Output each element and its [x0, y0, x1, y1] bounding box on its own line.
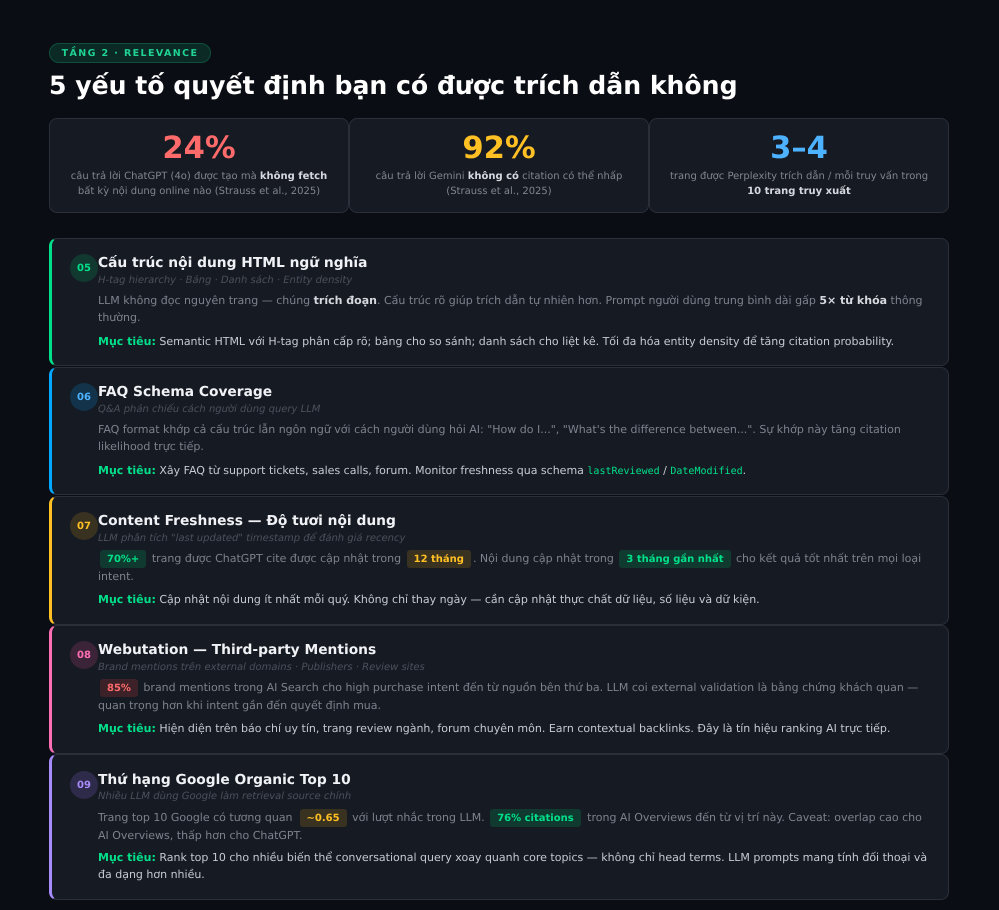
body text: intent.: [98, 570, 134, 583]
stat description: bất kỳ nội dung online nào (Strauss et al., 2025): [78, 186, 320, 197]
number badge 07: [70, 512, 98, 540]
stat card: 24%: [49, 118, 349, 213]
subtitle: Brand mentions trên external domains · Publishers · Review sites: [98, 662, 425, 673]
stat value: 92%: [462, 131, 536, 166]
stat description: [71, 170, 327, 197]
body text: [98, 550, 921, 583]
number badge 08: [70, 641, 98, 669]
body text: AI Overviews, thấp hơn cho ChatGPT.: [98, 829, 302, 842]
goal: Mục tiêu: Hiện diện trên báo chí uy tín, trang review ngành, forum chuyên môn. Earn contextual backlinks. Đây là tín hiệu ranking AI trực tiếp.: [98, 722, 890, 735]
number badge 05: [70, 254, 98, 282]
body text: FAQ format khớp cả cấu trúc lẫn ngôn ngữ với cách người dùng hỏi AI: "How do I...", "What's the difference between...". Sự khớp này tăng citation: [98, 423, 901, 436]
panel: factor 06: [49, 367, 949, 495]
body text: 3 tháng gần nhất: [626, 554, 724, 565]
stat value: 3–4: [770, 131, 828, 166]
heading: Webutation — Third-party Mentions: [98, 642, 376, 658]
stat description: 10 trang truy xuất: [747, 186, 851, 197]
stat description: [670, 170, 928, 197]
body text: trang được ChatGPT cite được cập nhật trong . Nội dung cập nhật trong cho kết quả tốt nhất trên mọi loại: [152, 552, 921, 565]
body text: 85%: [107, 683, 131, 694]
heading: Cấu trúc nội dung HTML ngữ nghĩa: [98, 255, 367, 271]
subtitle: H-tag hierarchy · Bảng · Danh sách · Entity density: [98, 275, 352, 286]
goal: Mục tiêu: Cập nhật nội dung ít nhất mỗi quý. Không chỉ thay ngày — cần cập nhật thực chất dữ liệu, số liệu và dữ kiện.: [98, 593, 760, 606]
body text: ~0.65: [307, 813, 340, 824]
subtitle: LLM phân tích "last updated" timestamp để đánh giá recency: [98, 533, 405, 544]
subtitle: Nhiều LLM dùng Google làm retrieval source chính: [98, 791, 351, 802]
panel: factor 05: [49, 238, 949, 366]
body text: Trang top 10 Google có tương quan với lượt nhắc trong LLM. trong AI Overviews đến từ vị trí này. Caveat: overlap cao cho: [98, 811, 922, 824]
body text: likelihood trực tiếp.: [98, 440, 204, 453]
goal: Mục tiêu: Xây FAQ từ support tickets, sales calls, forum. Monitor freshness qua schema lastReviewed / DateModified.: [98, 464, 746, 477]
heading: FAQ Schema Coverage: [98, 384, 272, 400]
tier tag: TẦNG 2 · RELEVANCE: [62, 48, 198, 59]
stat card: 92%: [349, 118, 649, 213]
panel: factor 07: [49, 496, 949, 625]
stat description: câu trả lời Gemini không có citation có thể nhấp: [376, 171, 622, 182]
body text: 70%+: [107, 554, 139, 565]
body text: 12 tháng: [414, 554, 464, 565]
stat description: [376, 170, 622, 197]
body text: brand mentions trong AI Search cho high purchase intent đến từ nguồn bên thứ ba. LLM coi external validation là bằng chứng khách quan —: [143, 681, 918, 694]
panel: factor 09: [49, 754, 949, 900]
goal: Mục tiêu: Rank top 10 cho nhiều biến thể conversational query xoay quanh core topics — không chỉ head terms. LLM prompts mang tính đối thoại và: [98, 851, 927, 864]
stat card: 3-4: [649, 118, 949, 213]
stat description: câu trả lời ChatGPT (4o) được tạo mà không fetch: [71, 171, 327, 182]
number badge 08: 08: [77, 650, 91, 661]
panel: factor 08: [49, 625, 949, 754]
body text: [98, 679, 918, 712]
stat value: 24%: [162, 131, 236, 166]
number badge 06: [70, 383, 98, 411]
number badge 06: 06: [77, 392, 91, 403]
body text: 76% citations: [497, 813, 574, 824]
stat description: trang được Perplexity trích dẫn / mỗi truy vấn trong: [670, 171, 928, 182]
tier tag: [49, 43, 211, 63]
body text: LLM không đọc nguyên trang — chúng trích đoạn. Cấu trúc rõ giúp trích dẫn tự nhiên hơn. Prompt người dùng trung bình dài gấp 5× từ khóa thông: [98, 294, 923, 307]
goal: [98, 851, 927, 881]
goal: Mục tiêu: Semantic HTML với H-tag phân cấp rõ; bảng cho so sánh; danh sách cho liệt kê. Tối đa hóa entity density để tăng citation probability.: [98, 335, 894, 348]
stat description: (Strauss et al., 2025): [446, 186, 552, 197]
body text: [98, 294, 923, 324]
heading: Thứ hạng Google Organic Top 10: [98, 772, 351, 788]
body text: thường.: [98, 311, 140, 324]
body text: [98, 809, 922, 842]
number badge 09: [70, 771, 98, 799]
number badge 07: 07: [77, 521, 91, 532]
body text: [98, 423, 901, 453]
goal: đa dạng hơn nhiều.: [98, 868, 205, 881]
heading: Content Freshness — Độ tươi nội dung: [98, 513, 396, 529]
body text: quan trọng hơn khi intent gần đến quyết định mua.: [98, 699, 381, 712]
subtitle: Q&A phản chiếu cách người dùng query LLM: [98, 404, 320, 415]
number badge 05: 05: [77, 263, 91, 274]
number badge 09: 09: [77, 780, 91, 791]
title: 5 yếu tố quyết định bạn có được trích dẫn không: [49, 71, 738, 100]
